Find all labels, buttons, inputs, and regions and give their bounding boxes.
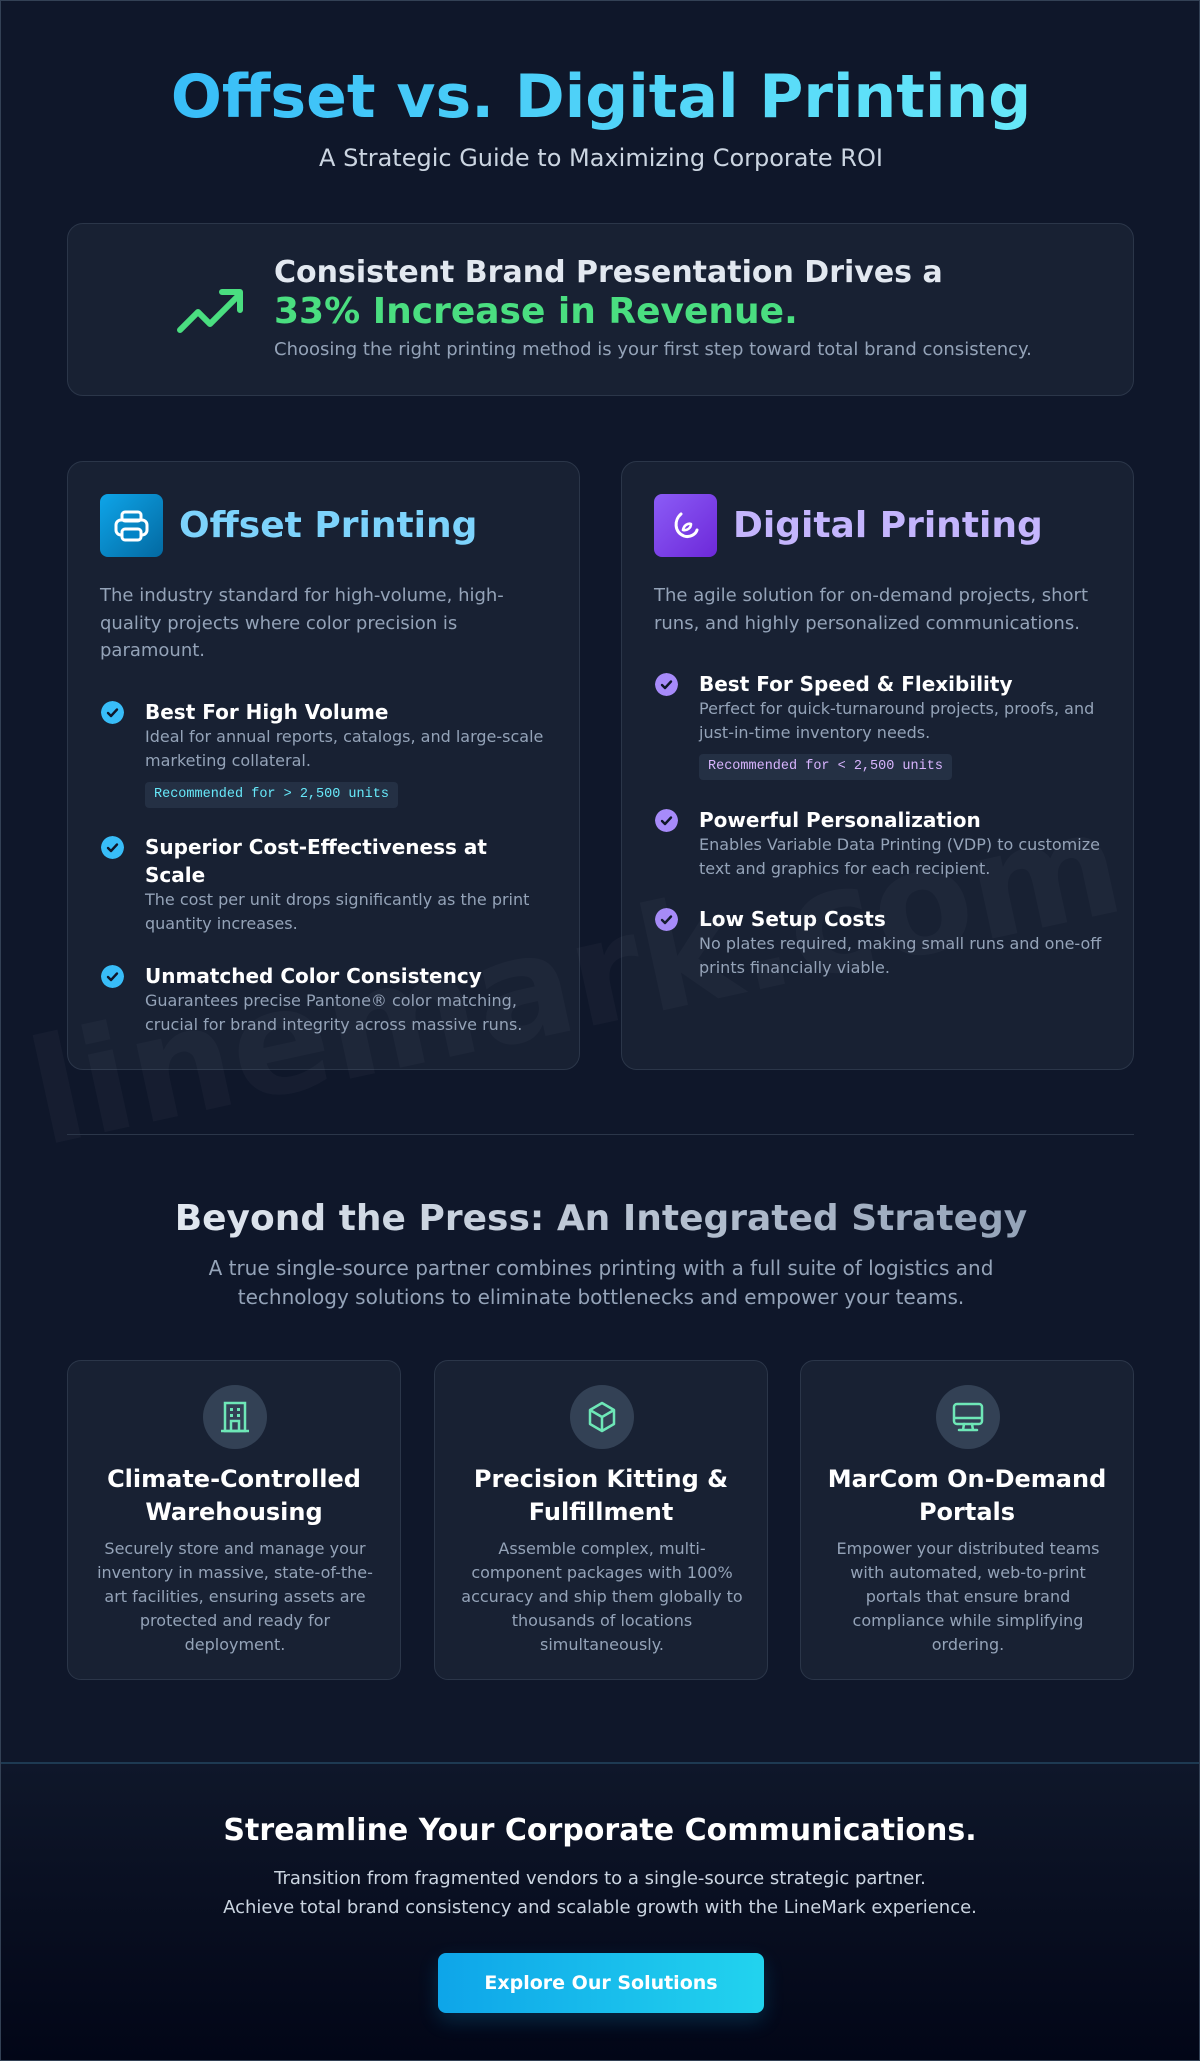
item: high volume bbox=[101, 700, 543, 808]
icon: monitor bbox=[936, 1385, 1000, 1449]
heading: offset printing: Offset Printing bbox=[179, 505, 477, 546]
title: Precision Kitting & Fulfillment bbox=[474, 1465, 728, 1526]
panel: digital printing bbox=[621, 461, 1134, 1070]
section heading: Beyond the Press: An Integrated Strategy bbox=[175, 1198, 1027, 1239]
section subtext: A true single-source partner combines printing with a full suite of logistics and technology solutions to eliminate bottlenecks and empower your teams. bbox=[209, 1256, 993, 1309]
item: personalization bbox=[655, 808, 1100, 878]
button bbox=[438, 1953, 764, 2013]
icon: printer bbox=[100, 494, 163, 557]
item: low setup bbox=[655, 907, 1102, 977]
item: cost effectiveness bbox=[101, 835, 529, 933]
description: The industry standard for high-volume, high-quality projects where color precision is paramount. bbox=[100, 585, 504, 661]
icon: box bbox=[570, 1385, 634, 1449]
footer heading: Streamline Your Corporate Communications. bbox=[223, 1813, 977, 1848]
item: low setup: Low Setup Costs bbox=[699, 907, 886, 931]
description: Securely store and manage your inventory in massive, state-of-the-art facilities, ensuring assets are protected and ready for deployment. bbox=[97, 1539, 373, 1654]
item: speed bbox=[655, 672, 1094, 780]
icon: drop bbox=[654, 494, 717, 557]
title: Climate-Controlled Warehousing bbox=[107, 1465, 361, 1526]
icon: trending up bbox=[177, 289, 243, 333]
footer text bbox=[223, 1868, 977, 1918]
item: speed: Best For Speed & Flexibility bbox=[699, 672, 1013, 696]
item: cost effectiveness: The cost per unit drops significantly as the print quantity increases. bbox=[145, 890, 529, 933]
callout headline: Choosing the right printing method is your first step toward total brand consistency. bbox=[274, 339, 1032, 360]
heading: digital printing: Digital Printing bbox=[733, 505, 1043, 546]
icon: building bbox=[203, 1385, 267, 1449]
item: high volume: Ideal for annual reports, catalogs, and large-scale marketing collateral. bbox=[145, 727, 543, 770]
item: personalization: Powerful Personalization bbox=[699, 808, 981, 832]
description: The agile solution for on-demand projects, short runs, and highly personalized communications. bbox=[654, 585, 1088, 634]
footer text: Achieve total brand consistency and scalable growth with the LineMark experience. bbox=[223, 1897, 977, 1918]
item: low setup: No plates required, making small runs and one-off prints financially viable. bbox=[699, 934, 1101, 977]
item: cost effectiveness: Superior Cost-Effectiveness at Scale bbox=[145, 835, 487, 887]
item: high volume: Best For High Volume bbox=[145, 700, 388, 724]
watermark: linemark.com bbox=[16, 778, 1136, 1179]
footer bbox=[1, 1762, 1199, 2061]
panel: kitting bbox=[434, 1360, 768, 1680]
item: color consistency: Guarantees precise Pantone® color matching, crucial for brand integrity across massive runs. bbox=[145, 991, 522, 1034]
panel: warehousing bbox=[67, 1360, 401, 1680]
title: MarCom On-Demand Portals bbox=[828, 1465, 1106, 1526]
item: speed: Recommended for < 2,500 units bbox=[708, 759, 943, 774]
panel: portals bbox=[800, 1360, 1134, 1680]
title: Offset vs. Digital Printing bbox=[171, 62, 1031, 132]
stat callout box bbox=[67, 223, 1134, 396]
callout headline: Consistent Brand Presentation Drives a bbox=[274, 255, 943, 290]
description: Empower your distributed teams with automated, web-to-print portals that ensure brand compliance while simplifying ordering. bbox=[836, 1539, 1100, 1654]
item: color consistency bbox=[101, 964, 522, 1034]
description: Assemble complex, multi-component packages with 100% accuracy and ship them globally to thousands of locations simultaneously. bbox=[461, 1539, 743, 1654]
item: personalization: Enables Variable Data Printing (VDP) to customize text and graphics for each recipient. bbox=[699, 835, 1100, 878]
button: Explore Our Solutions bbox=[484, 1972, 718, 1994]
subtitle: A Strategic Guide to Maximizing Corporate ROI bbox=[319, 144, 883, 172]
item: high volume: Recommended for > 2,500 units bbox=[154, 787, 389, 802]
footer text: Transition from fragmented vendors to a single-source strategic partner. bbox=[274, 1868, 926, 1889]
panel: offset printing bbox=[67, 461, 580, 1070]
item: color consistency: Unmatched Color Consistency bbox=[145, 964, 482, 988]
item: speed: Perfect for quick-turnaround projects, proofs, and just-in-time inventory needs. bbox=[699, 699, 1094, 742]
callout headline: 33% Increase in Revenue. bbox=[274, 291, 798, 332]
callout headline bbox=[274, 255, 1032, 360]
